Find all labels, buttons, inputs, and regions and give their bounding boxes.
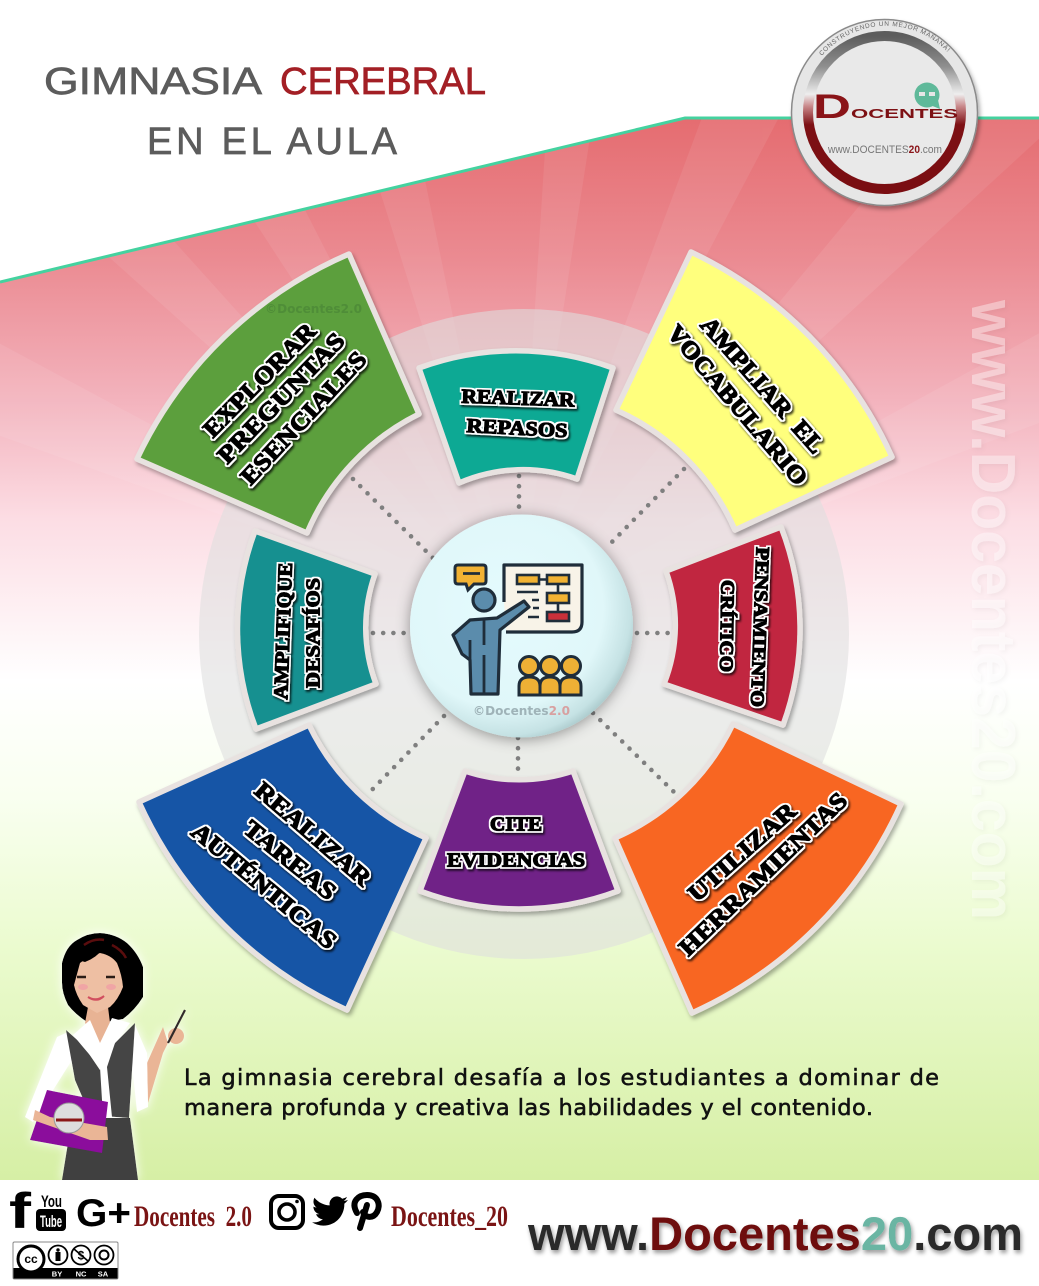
- sector: utilizar herramientas: UTILIZAR: [684, 798, 802, 907]
- vertical watermark url: www.Docentes20.com: [958, 299, 1027, 920]
- sector: explorar preguntas esenciales: PREGUNTAS: [213, 328, 350, 469]
- sector: cite evidencias: [420, 771, 618, 909]
- dotted connectors: [353, 469, 684, 796]
- sector: amplifique desafios: DESAFÍOS: [302, 578, 325, 688]
- logo: Docentes 2.0 badge: OCENTES: [851, 106, 959, 121]
- creative commons badge: BY: [52, 1270, 62, 1278]
- title: CEREBRAL: [280, 61, 486, 103]
- sector: utilizar herramientas: HERRAMIENTAS: [674, 788, 853, 961]
- icon: google plus: G+: [76, 1192, 131, 1235]
- title: EN EL AULA: [147, 121, 398, 163]
- icon: youtube: [36, 1192, 66, 1231]
- forearm right: [147, 1027, 168, 1103]
- sector: realizar tareas autenticas: [139, 725, 426, 1010]
- icon: twitter: [312, 1196, 348, 1226]
- arm across: [33, 1110, 108, 1140]
- creative commons badge: SA: [98, 1270, 109, 1278]
- sector: ampliar el vocabulario: [616, 252, 892, 530]
- icon: youtube: You: [41, 1192, 62, 1211]
- icon: speech bubble: [455, 565, 486, 590]
- skirt: [62, 1118, 138, 1180]
- sector: realizar repasos: REPASOS: [466, 415, 568, 442]
- sector: pensamiento critico: CRÍTICO: [715, 580, 739, 672]
- vest: [66, 1023, 135, 1118]
- icon: audience: [519, 656, 581, 695]
- title: [44, 61, 486, 163]
- icon: pinterest: [354, 1195, 379, 1228]
- sector: amplifique desafios: [237, 531, 376, 729]
- sector: utilizar herramientas: [615, 724, 901, 1013]
- sector: realizar repasos: [419, 351, 613, 483]
- icon: presenter: [453, 589, 529, 694]
- logo: Docentes 2.0 badge: [790, 18, 983, 212]
- shirt: [73, 1018, 130, 1117]
- sector: realizar tareas autenticas: REALIZAR: [249, 777, 376, 892]
- description text: manera profunda y creativa las habilidades y el contenido.: [184, 1095, 873, 1121]
- sector: explorar preguntas esenciales: [137, 254, 419, 533]
- social handle: Docentes 2.0: Docentes 2.0: [134, 1200, 252, 1233]
- face: [74, 953, 123, 1013]
- icon: youtube: Tube: [40, 1212, 62, 1231]
- creative commons badge: cc: [24, 1252, 38, 1266]
- icon: instagram: [271, 1196, 303, 1228]
- social handle: Docentes_20: Docentes_20: [391, 1200, 508, 1233]
- wheel backing disc: [199, 309, 849, 959]
- logo: Docentes 2.0 badge: D: [813, 88, 851, 126]
- logo: Docentes 2.0 badge: www.DOCENTES20.com: [827, 144, 942, 156]
- character: teacher with folder: [25, 933, 185, 1180]
- folder logo: [54, 1103, 84, 1133]
- creative commons badge: $: [78, 1248, 85, 1262]
- hair: [62, 933, 143, 1022]
- central hub with teacher icon: [410, 514, 633, 738]
- icon: facebook: f: [9, 1183, 31, 1239]
- icon: presentation board: [504, 565, 582, 632]
- logo: Docentes 2.0 badge: CONSTRUYENDO UN MEJOR MAÑANA!: [820, 21, 950, 55]
- footer white band: [0, 1180, 1039, 1286]
- sector: ampliar el vocabulario: VOCABULARIO: [661, 320, 812, 491]
- hub watermark: ©Docentes2.0: [473, 703, 570, 718]
- sector: explorar preguntas esenciales: ©Docentes2.0: [265, 301, 362, 316]
- description text: La gimnasia cerebral desafía a los estudiantes a dominar de: [184, 1065, 939, 1091]
- sector: realizar repasos: REALIZAR: [461, 386, 575, 412]
- sector: realizar tareas autenticas: TAREAS: [238, 816, 341, 906]
- sector: explorar preguntas esenciales: ESENCIALES: [236, 347, 372, 490]
- sector: realizar tareas autenticas: AUTÉNTICAS: [186, 819, 341, 955]
- description text: [184, 1065, 939, 1121]
- website url: www.Docentes20.com: [527, 1207, 1023, 1260]
- sector: cite evidencias: CITE: [490, 814, 542, 836]
- creative commons badge: NC: [76, 1270, 87, 1278]
- sector: pensamiento critico: [664, 527, 800, 725]
- sector: pensamiento critico: PENSAMIENTO: [746, 547, 773, 707]
- sector: cite evidencias: EVIDENCIAS: [447, 850, 585, 872]
- sector: ampliar el vocabulario: AMPLIAR EL: [695, 312, 829, 459]
- sector: explorar preguntas esenciales: EXPLORAR: [199, 318, 322, 443]
- neck: [85, 1007, 110, 1045]
- sleeves: [25, 1032, 72, 1122]
- title: GIMNASIA: [44, 61, 263, 103]
- folder: [30, 1090, 108, 1153]
- sector: amplifique desafios: AMPLIFIQUE: [270, 562, 297, 700]
- creative commons badge: [13, 1242, 118, 1279]
